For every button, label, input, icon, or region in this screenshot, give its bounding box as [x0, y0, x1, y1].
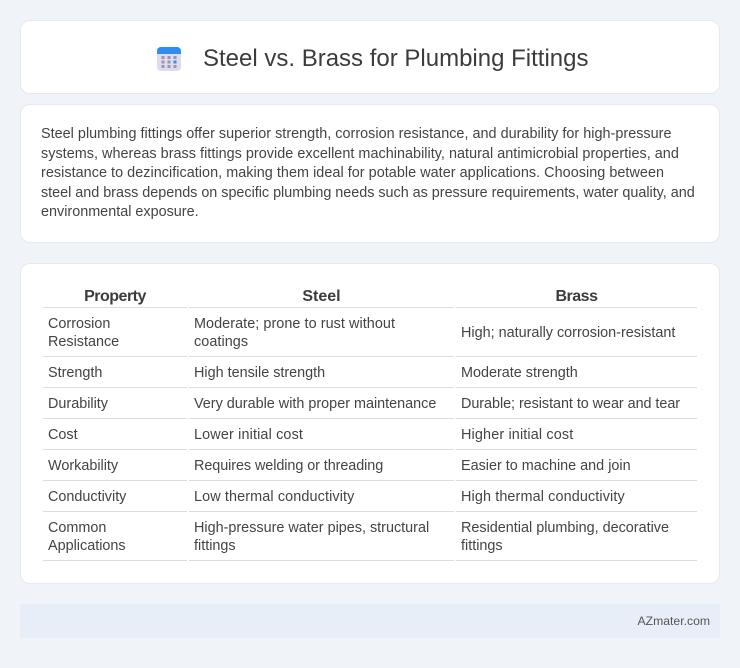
intro text: systems, whereas brass fittings provide excellent machinability, natural antimicrobial properties, and: [41, 146, 679, 162]
table header: Property: [84, 288, 146, 305]
table header: Steel: [302, 288, 341, 305]
row: strength: Strength: [48, 365, 102, 381]
row: workability: Workability: [48, 458, 118, 474]
row: cost: Higher initial cost: [461, 427, 573, 443]
row: durability: Very durable with proper maintenance: [194, 396, 436, 412]
row: cost: Cost: [48, 427, 78, 443]
row: durability: [48, 396, 680, 412]
panel: comparison table: [20, 263, 720, 584]
row: common applications: Applications: [48, 538, 126, 554]
row: workability: Easier to machine and join: [461, 458, 631, 474]
row: strength: [48, 365, 578, 381]
row: workability: [48, 458, 631, 474]
row: durability: Durable; resistant to wear and tear: [461, 396, 680, 412]
row: workability: Requires welding or threading: [194, 458, 383, 474]
row: conductivity: High thermal conductivity: [461, 489, 625, 505]
row: common applications: Residential plumbing, decorative: [461, 520, 669, 536]
intro text: environmental exposure.: [41, 204, 199, 220]
row: cost: Lower initial cost: [194, 427, 303, 443]
title: Steel vs. Brass for Plumbing Fittings: [203, 45, 588, 72]
panel: introduction: [20, 104, 720, 243]
row: common applications: High-pressure water pipes, structural: [194, 520, 429, 536]
table header: Brass: [556, 288, 597, 305]
row: conductivity: Low thermal conductivity: [194, 489, 354, 505]
row: corrosion resistance: Corrosion: [48, 316, 110, 332]
row: cost: [48, 427, 574, 443]
row: durability: Durability: [48, 396, 108, 412]
footer credit: AZmater.com: [638, 614, 710, 628]
intro text: [41, 126, 695, 220]
row: conductivity: Conductivity: [48, 489, 126, 505]
row: conductivity: [48, 489, 625, 505]
row: corrosion resistance: coatings: [194, 334, 248, 350]
icon: calendar: [157, 47, 181, 71]
row: common applications: Common: [48, 520, 106, 536]
row: corrosion resistance: Moderate; prone to rust without: [194, 316, 395, 332]
row: corrosion resistance: High; naturally corrosion-resistant: [461, 325, 675, 341]
intro text: resistance to dezincification, making them ideal for potable water applications. Choosing between: [41, 165, 664, 181]
table header: [84, 288, 598, 305]
row: strength: High tensile strength: [194, 365, 325, 381]
row: common applications: [48, 520, 669, 554]
row: common applications: fittings: [461, 538, 503, 554]
row: strength: Moderate strength: [461, 365, 578, 381]
panel: header: [20, 20, 720, 94]
footer bar: [20, 604, 720, 638]
row: corrosion resistance: [48, 316, 676, 350]
row: common applications: fittings: [194, 538, 236, 554]
intro text: Steel plumbing fittings offer superior strength, corrosion resistance, and durability for high-pressure: [41, 126, 672, 142]
intro text: steel and brass depends on specific plumbing needs such as pressure requirements, water quality, and: [41, 184, 695, 200]
row: corrosion resistance: Resistance: [48, 334, 119, 350]
